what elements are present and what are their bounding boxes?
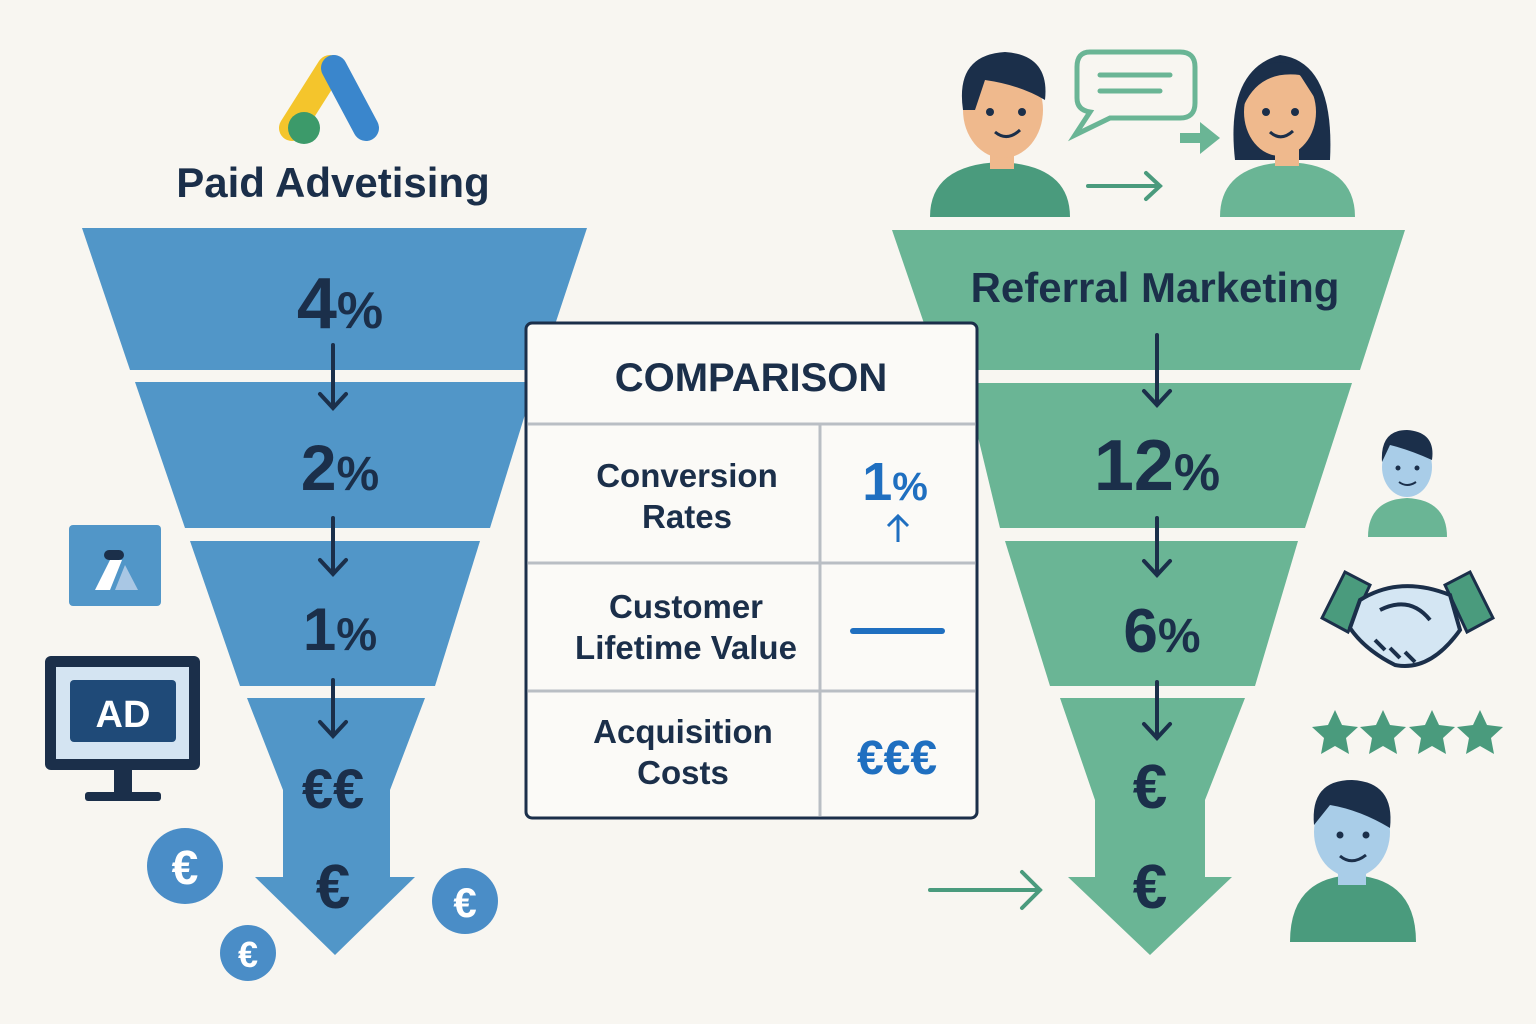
row labels: Costs [637, 754, 729, 791]
row labels: Rates [642, 498, 732, 535]
icon: small person [1368, 430, 1447, 537]
panel: comparison table [526, 323, 977, 818]
arrow: between people [1088, 173, 1160, 199]
referral funnel labels: € [1133, 853, 1167, 922]
row labels: Conversion [596, 457, 778, 494]
referral funnel labels [1094, 426, 1220, 922]
icon: large person [1290, 780, 1416, 942]
icons: euro coins: € [172, 842, 198, 895]
referral funnel labels: 12% [1094, 426, 1220, 506]
arrows: referral funnel [1144, 335, 1170, 738]
icon: person left [930, 52, 1070, 217]
paid funnel labels: 2% [301, 432, 379, 504]
arrow: into referral funnel [930, 872, 1040, 908]
icon: google ads logo [288, 68, 366, 144]
icon: monitor AD [45, 656, 200, 801]
row labels: Customer [609, 588, 763, 625]
paid funnel labels [297, 264, 383, 922]
icon: person right [1220, 55, 1355, 217]
panel: referral funnel [892, 230, 1405, 955]
row labels: Acquisition [593, 713, 773, 750]
paid funnel labels: 1% [303, 596, 377, 663]
paid funnel labels: €€ [302, 757, 364, 820]
referral funnel labels: 6% [1123, 597, 1201, 666]
panel: paid funnel [82, 228, 587, 955]
row values: 1% [862, 452, 928, 512]
referral funnel labels: € [1133, 753, 1167, 822]
icon: stars [1312, 710, 1503, 754]
title: paid advertising: Paid Advetising [176, 159, 490, 206]
paid funnel labels: 4% [297, 264, 383, 344]
icons: euro coins: € [453, 879, 477, 926]
icon: handshake [1322, 572, 1493, 666]
title: referral marketing: Referral Marketing [971, 264, 1339, 311]
paid funnel labels: € [316, 853, 350, 922]
row labels [575, 457, 797, 791]
arrows: paid funnel [320, 345, 346, 736]
icon: monitor AD: AD [96, 694, 150, 736]
row values [850, 452, 945, 785]
icons: euro coins [147, 828, 498, 981]
icon: small ads square [69, 525, 161, 606]
icon: speech bubble [1075, 52, 1195, 135]
icons: euro coins: € [238, 934, 258, 975]
row labels: Lifetime Value [575, 629, 797, 666]
table header: COMPARISON [615, 356, 887, 400]
icon: small green arrow [1180, 122, 1220, 154]
row values: €€€ [857, 732, 937, 785]
